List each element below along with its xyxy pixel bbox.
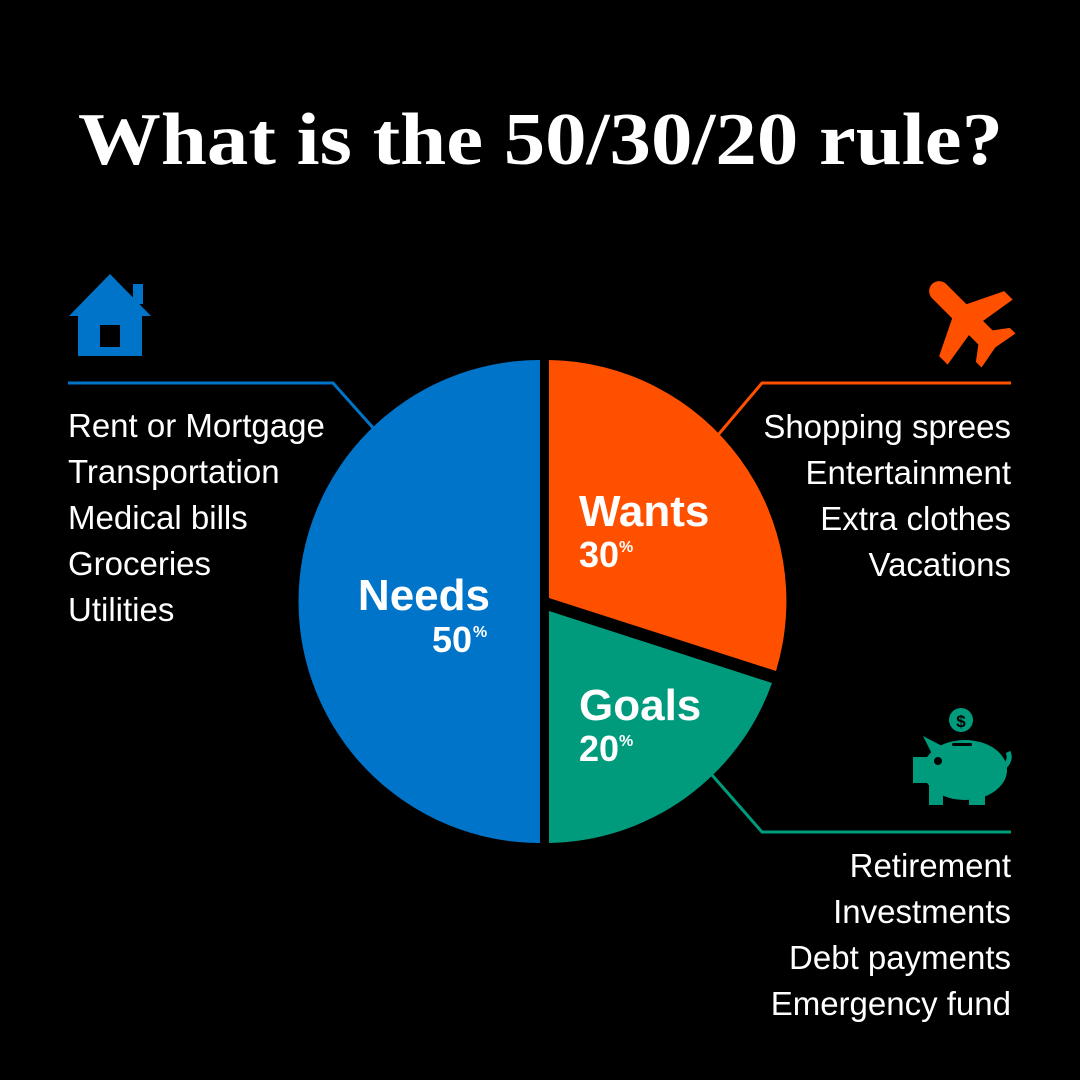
slice: needs <box>298 360 540 843</box>
label: goals: 20 <box>579 728 619 769</box>
label: goals: % <box>619 733 633 750</box>
icon: piggy bank: $ <box>956 712 966 731</box>
list: needs: Transportation <box>68 453 280 490</box>
list: wants: Entertainment <box>806 454 1011 491</box>
list: needs: Rent or Mortgage <box>68 407 325 444</box>
slice: wants <box>549 360 786 671</box>
connector: needs <box>68 383 375 430</box>
list: needs: Medical bills <box>68 499 248 536</box>
list: wants <box>763 408 1011 583</box>
label: wants: Wants <box>579 487 709 536</box>
icon: airplane <box>900 252 1031 383</box>
list: needs: Groceries <box>68 545 211 582</box>
list: goals: Retirement <box>850 847 1011 884</box>
list: needs: Utilities <box>68 591 174 628</box>
title: What is the 50/30/20 rule? <box>78 99 1003 181</box>
list: goals: Debt payments <box>789 939 1011 976</box>
list: goals: Emergency fund <box>771 985 1011 1022</box>
list: wants: Vacations <box>869 546 1011 583</box>
list: goals <box>771 847 1011 1022</box>
connector: goals <box>712 775 1011 832</box>
label: needs: 50 <box>432 619 472 660</box>
icon: piggy bank <box>913 708 1009 805</box>
list: wants: Extra clothes <box>820 500 1011 537</box>
label: needs: Needs <box>358 571 490 620</box>
label: wants: 30 <box>579 534 619 575</box>
icon: house <box>69 274 151 356</box>
label: wants: % <box>619 539 633 556</box>
label: needs <box>358 571 490 660</box>
label: wants <box>579 487 709 575</box>
label: goals <box>579 681 701 769</box>
list: needs <box>68 407 325 628</box>
connector: wants <box>718 383 1011 435</box>
list: wants: Shopping sprees <box>763 408 1011 445</box>
label: goals: Goals <box>579 681 701 730</box>
label: needs: % <box>473 624 487 641</box>
pie chart <box>298 360 786 843</box>
list: goals: Investments <box>833 893 1011 930</box>
slice: goals <box>549 611 772 843</box>
